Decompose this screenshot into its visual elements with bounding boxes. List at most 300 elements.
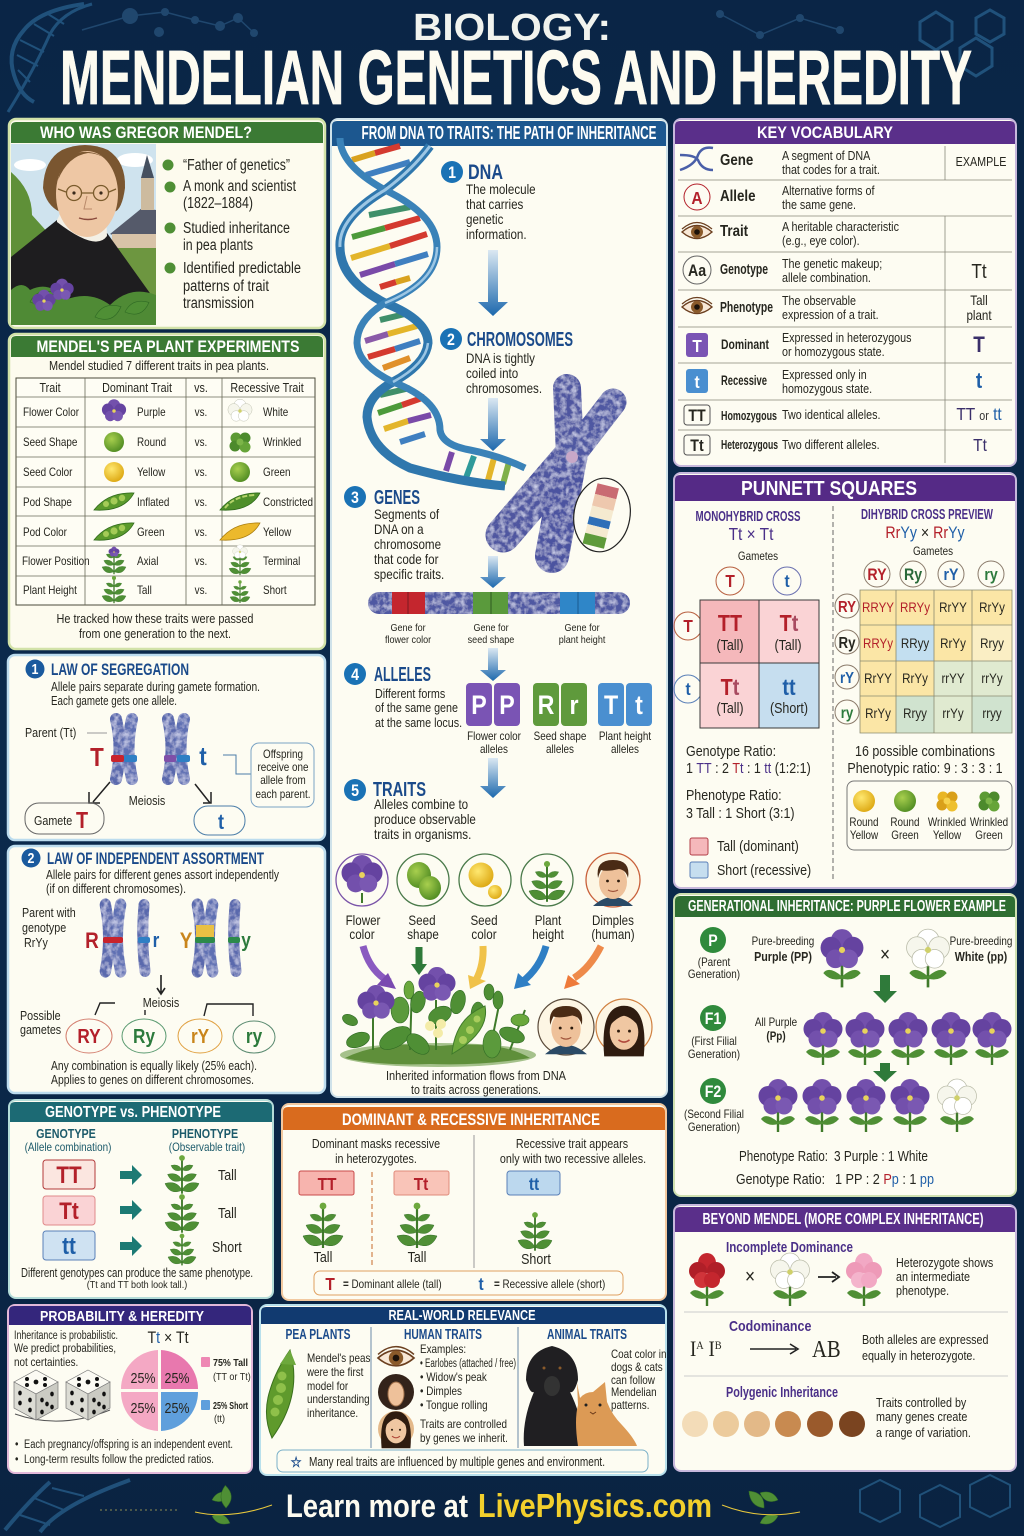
term icons (680, 148, 713, 455)
heading: FROM DNA TO TRAITS: THE PATH OF INHERITANCE (362, 123, 656, 143)
monohybrid cross (674, 509, 819, 878)
plants (303, 1203, 552, 1267)
footer text: LivePhysics.com (478, 1487, 712, 1524)
codominance: equally in heterozygote. (862, 1349, 975, 1363)
bullet list: transmission (183, 295, 254, 312)
ratios: Genotype Ratio: (736, 1172, 825, 1188)
gene bar: plant height (559, 634, 606, 646)
dihybrid cross: rY (840, 670, 854, 687)
dihybrid cross: Phenotypic ratio: 9 : 3 : 3 : 1 (847, 760, 1003, 776)
step 2 chromosomes (440, 328, 573, 396)
allele tiles: Flower color (467, 730, 521, 743)
gamete T: T (76, 808, 88, 833)
gene bar (368, 592, 630, 646)
caption (386, 1069, 567, 1097)
chromosomes: Meiosis (143, 996, 179, 1010)
dihybrid cross: RRYy (900, 600, 931, 615)
chromosome diagram: Parent (Tt) (25, 726, 76, 740)
allele tiles: T (604, 690, 619, 720)
pie legend (201, 1357, 251, 1425)
footnote: from one generation to the next. (79, 627, 231, 641)
step 2 chromosomes: coiled into (466, 366, 518, 381)
dihybrid cross: RrYy × RrYy (885, 524, 965, 542)
human traits column: by genes we inherit. (420, 1432, 508, 1445)
step 4 alleles (344, 663, 462, 730)
chromosomes (85, 905, 253, 1016)
bullets: • (15, 1453, 19, 1466)
monohybrid cross: Tall (dominant) (717, 838, 799, 854)
example column: Tt (973, 435, 987, 455)
legend (314, 1271, 623, 1295)
step 3 genes: chromosome (374, 537, 441, 552)
panel: pea plant experiments (9, 334, 325, 649)
possible gametes (20, 1009, 275, 1053)
dihybrid cross: ry (984, 566, 998, 584)
definitions: or homozygous state. (782, 345, 885, 359)
monohybrid cross: tt (782, 675, 796, 700)
human traits column: HUMAN TRAITS (404, 1327, 482, 1343)
note box (277, 1450, 648, 1472)
monohybrid cross: Gametes (738, 550, 778, 563)
phenotype plants: Tall (218, 1205, 237, 1221)
incomplete dominance: Heterozygote shows (896, 1256, 993, 1270)
trait table: Terminal (263, 555, 300, 568)
intro text: We predict probabilities, (14, 1343, 116, 1355)
animal traits column (524, 1327, 667, 1446)
pie legend: (TT or Tt) (213, 1371, 251, 1383)
incomplete dominance: phenotype. (896, 1284, 949, 1298)
pie chart: 25% (131, 1400, 155, 1416)
number badge and heading: 2 (28, 850, 34, 866)
heading: MENDEL'S PEA PLANT EXPERIMENTS (36, 338, 300, 356)
trait table: Yellow (137, 466, 165, 479)
dihybrid cross: Green (891, 829, 919, 842)
dihybrid cross: RrYy (940, 636, 967, 651)
P generation: Generation) (688, 968, 740, 981)
example column: Tt (971, 260, 987, 282)
plants: Tall (314, 1249, 332, 1265)
trait table: Pod Shape (23, 496, 72, 509)
footer text (286, 1487, 712, 1524)
term icons: TT (688, 407, 706, 425)
F1 generation: All Purple (755, 1016, 797, 1029)
bullet list (162, 157, 301, 312)
terms: Trait (720, 223, 748, 240)
note (51, 1059, 257, 1087)
P generation (688, 927, 1012, 987)
column heads: (Allele combination) (25, 1141, 111, 1154)
ratios: Phenotype Ratio: (739, 1149, 828, 1165)
terms: Genotype (720, 262, 768, 278)
trait table: Inflated (137, 496, 169, 509)
panel: law of independent assortment (8, 846, 325, 1093)
caption: Different genotypes can produce the same phenotype. (21, 1266, 253, 1280)
step 5 traits: Alleles combine to (374, 797, 468, 812)
dihybrid cross (835, 507, 1012, 850)
possible gametes: RY (77, 1025, 101, 1047)
animal traits column: Mendelian (611, 1386, 657, 1399)
step 5 traits (344, 779, 476, 842)
gamete t: t (218, 811, 224, 834)
definitions: the same gene. (782, 198, 856, 212)
step 1 DNA: The molecule (466, 182, 536, 197)
dihybrid cross: 16 possible combinations (855, 743, 995, 759)
codominance: I (690, 1338, 696, 1361)
human traits column (378, 1327, 516, 1448)
column heads: PHENOTYPE (172, 1127, 238, 1141)
monohybrid cross: Tt × Tt (729, 524, 774, 544)
dihybrid cross: Round (890, 816, 920, 829)
trait table: Dominant Trait (102, 381, 173, 395)
pea plants column: Mendel's peas (307, 1352, 370, 1365)
gamete T: Gamete (34, 814, 72, 828)
allele boxes: Tt (414, 1174, 429, 1194)
trait circles: Plant (535, 913, 562, 928)
text headers: Recessive trait appears (516, 1137, 628, 1151)
bullet list: (1822–1884) (183, 195, 253, 212)
trait table: Flower Color (23, 406, 79, 419)
description: Allele pairs separate during gamete formation. (51, 680, 260, 694)
F2 generation (684, 1078, 976, 1134)
arrow (478, 250, 508, 316)
term icons: Tt (690, 437, 704, 455)
heading: PROBABILITY & HEREDITY (40, 1309, 204, 1325)
heading: DOMINANT & RECESSIVE INHERITANCE (342, 1111, 600, 1129)
chromosomes: R (85, 929, 99, 953)
term icons: Aa (688, 262, 707, 280)
bullet list: patterns of trait (183, 278, 270, 295)
codominance: I (704, 1338, 715, 1361)
ratios (736, 1149, 934, 1188)
dihybrid cross: RRYY (862, 600, 895, 615)
P generation: P (708, 932, 718, 950)
human traits column: • Widow's peak (420, 1371, 487, 1384)
intro text: not certainties. (14, 1356, 78, 1369)
cross label: Tt × Tt (147, 1329, 189, 1347)
text headers: Dominant masks recessive (312, 1137, 440, 1151)
step 2 chromosomes: CHROMOSOMES (467, 329, 573, 351)
column heads (25, 1127, 245, 1154)
example column: TT or tt (956, 404, 1002, 424)
bullets: Each pregnancy/offspring is an independent event. (24, 1439, 233, 1451)
trait table: Green (263, 466, 291, 479)
step 3 genes: that code for (374, 552, 438, 567)
panel: from DNA to traits (331, 119, 667, 1097)
codominance: Codominance (729, 1318, 812, 1334)
bullet list: Studied inheritance (183, 220, 290, 237)
P generation: Pure-breeding (950, 935, 1012, 948)
bullets (15, 1438, 233, 1466)
step 5 traits: traits in organisms. (374, 827, 471, 842)
human traits column: Examples: (420, 1343, 466, 1356)
human offspring portraits (538, 999, 652, 1056)
allele tiles: P (499, 690, 515, 720)
allele tiles: r (569, 690, 579, 720)
trait circles: color (349, 927, 375, 942)
trait table: Flower Position (22, 555, 90, 568)
step 1 DNA: genetic (466, 212, 503, 227)
trait table: Recessive Trait (230, 381, 304, 395)
monohybrid cross: (Tall) (716, 700, 744, 716)
dihybrid cross: Wrinkled (928, 816, 966, 829)
animal traits column: dogs & cats (611, 1361, 663, 1374)
step 5 traits: 5 (351, 782, 359, 800)
arrows (120, 1165, 142, 1256)
pea plants column: were the first (306, 1366, 363, 1379)
term icons: t (694, 372, 700, 392)
pea plants column (266, 1327, 370, 1438)
caption: Inherited information flows from DNA (386, 1069, 567, 1083)
footnote: He tracked how these traits were passed (56, 612, 254, 626)
genotype boxes: Tt (59, 1198, 79, 1224)
trait table: Tall (137, 584, 152, 597)
description: Allele pairs for different genes assort independently (46, 868, 280, 882)
footer vines (195, 1485, 800, 1524)
note: Applies to genes on different chromosomes. (51, 1073, 254, 1087)
step 2 chromosomes: chromosomes. (466, 381, 542, 396)
heading: WHO WAS GREGOR MENDEL? (40, 124, 252, 142)
footer text: Learn more at (286, 1488, 468, 1524)
bullet list: in pea plants (183, 237, 253, 254)
pie chart: 25% (131, 1370, 155, 1386)
dihybrid cross: RY (838, 599, 856, 616)
chromosome diagram: Meiosis (129, 794, 165, 808)
trait table: vs. (195, 436, 207, 449)
dihybrid cross: Yellow (933, 829, 961, 842)
arrow (873, 1063, 897, 1082)
definitions: The observable (782, 294, 856, 308)
definitions: Expressed only in (782, 368, 867, 382)
P generation: White (pp) (955, 950, 1007, 964)
monohybrid cross: (Tall) (774, 637, 802, 653)
trait circles: shape (407, 927, 439, 942)
step 2 chromosomes: 2 (447, 331, 455, 349)
allele tiles: Plant height (599, 730, 651, 743)
dihybrid cross: RRYy (863, 636, 894, 651)
coloured arrows into plants (363, 946, 601, 989)
number badge and heading: 1 (32, 661, 39, 677)
step 3 genes: DNA on a (374, 522, 424, 537)
panel: who was Gregor Mendel (9, 119, 325, 328)
text headers (312, 1137, 646, 1166)
note box: ☆ (290, 1454, 302, 1470)
terms: Recessive (721, 373, 767, 388)
possible gametes: ry (246, 1025, 263, 1047)
legend: t (478, 1274, 484, 1294)
animal traits column: Coat color in (611, 1348, 667, 1361)
number badge and heading: LAW OF INDEPENDENT ASSORTMENT (47, 850, 264, 868)
heading: REAL-WORLD RELEVANCE (388, 1308, 536, 1324)
incomplete dominance (689, 1240, 993, 1306)
definitions: A heritable characteristic (782, 220, 899, 234)
chromosomes: y (241, 929, 251, 951)
dihybrid cross: Rryy (903, 706, 928, 721)
allele boxes (299, 1171, 560, 1195)
dihybrid cross: rY (944, 566, 958, 584)
description: (if on different chromosomes). (46, 882, 186, 896)
trait table: Seed Shape (23, 436, 77, 449)
polygenic inheritance (682, 1385, 971, 1440)
possible gametes: Ry (133, 1025, 156, 1047)
dihybrid cross: rrYY (941, 671, 965, 686)
dihybrid cross: Yellow (850, 829, 878, 842)
chromosomes: Y (180, 929, 193, 953)
terms: Phenotype (720, 300, 773, 316)
definitions: Alternative forms of (782, 184, 875, 198)
pie chart: 25% (165, 1370, 189, 1386)
example column: plant (966, 308, 992, 323)
step 1 DNA: information. (466, 227, 527, 242)
text headers: only with two recessive alleles. (500, 1152, 646, 1166)
trait table: vs. (195, 466, 207, 479)
trait table: Trait (40, 381, 61, 395)
title: BIOLOGY: (413, 7, 611, 49)
example column: Tall (970, 293, 988, 308)
monohybrid cross: Tt (780, 611, 798, 636)
incomplete dominance: Incomplete Dominance (726, 1240, 853, 1256)
panel: dominant and recessive inheritance (282, 1104, 666, 1300)
monohybrid cross: Tt (721, 675, 739, 700)
legend: = Recessive allele (short) (494, 1278, 605, 1291)
terms: Gene (720, 152, 753, 169)
human traits column: • Dimples (420, 1385, 462, 1398)
panel: Punnett squares (674, 473, 1016, 888)
monohybrid cross: (Tall) (716, 637, 744, 653)
dihybrid cross: RrYY (864, 671, 892, 686)
legend: T (325, 1274, 335, 1294)
polygenic inheritance: Traits controlled by (876, 1396, 966, 1410)
description (51, 680, 260, 708)
dihybrid cross: Ry (838, 635, 856, 652)
trait table: Round (137, 436, 166, 449)
trait circles: Seed (470, 913, 498, 928)
step 1 DNA (441, 161, 536, 242)
dice (14, 1370, 110, 1421)
heading: KEY VOCABULARY (757, 124, 893, 142)
arrow (480, 648, 506, 681)
term icons: A (691, 188, 703, 208)
pie legend: 25% Short (213, 1400, 248, 1412)
ratios: 1 PP : 2 Pp : 1 pp (835, 1172, 934, 1188)
monohybrid cross: t (784, 571, 790, 591)
step 2 chromosomes: DNA is tightly (466, 351, 536, 366)
dihybrid cross: RY (867, 566, 887, 584)
heading: GENOTYPE vs. PHENOTYPE (45, 1104, 221, 1121)
step 4 alleles: of the same gene (375, 701, 458, 715)
animal traits column: can follow (611, 1374, 655, 1387)
F2 generation: (Second Filial (684, 1108, 744, 1121)
definitions: allele combination. (782, 271, 871, 285)
polygenic inheritance: many genes create (876, 1410, 967, 1424)
P generation: × (880, 943, 890, 965)
chromosome diagram (25, 719, 251, 808)
pea plants illustration (340, 967, 536, 1067)
trait table: White (263, 406, 288, 419)
dihybrid cross: RrYy (902, 671, 929, 686)
DNA double helix (340, 138, 525, 486)
P generation: Pure-breeding (752, 935, 814, 948)
decoration: header DNA and molecules (8, 4, 1004, 112)
step 4 alleles: ALLELES (374, 664, 431, 686)
possible gametes: rY (191, 1025, 210, 1047)
text headers: in heterozygotes. (335, 1152, 417, 1166)
legend: = Dominant allele (tall) (343, 1278, 442, 1291)
animal traits column: patterns. (611, 1399, 649, 1412)
callout: offspring: Offspring (263, 748, 303, 761)
arrow (480, 398, 506, 451)
trait table: vs. (194, 381, 208, 395)
trait table: vs. (195, 406, 207, 419)
gamete t (194, 806, 245, 835)
chromosome illustration (503, 388, 636, 556)
trait circles: (human) (591, 927, 635, 942)
genotype boxes (43, 1160, 95, 1260)
codominance: Both alleles are expressed (862, 1333, 989, 1347)
trait circles: height (532, 927, 564, 942)
number badge and heading (22, 848, 264, 868)
caption: to traits across generations. (411, 1083, 541, 1097)
terms: Homozygous (721, 409, 777, 423)
allele boxes: TT (318, 1174, 337, 1194)
definitions: homozygous state. (782, 382, 872, 396)
genotype boxes: TT (56, 1162, 82, 1188)
definitions: Two different alleles. (782, 438, 880, 452)
parent genotype label: genotype (22, 921, 66, 935)
panel: genotype vs phenotype (9, 1100, 273, 1298)
allele boxes: tt (529, 1174, 540, 1194)
animal traits column: ANIMAL TRAITS (547, 1327, 627, 1343)
step 4 alleles: 4 (351, 666, 359, 684)
dihybrid cross: rrYy (981, 671, 1003, 686)
dihybrid cross: Round (849, 816, 879, 829)
step 4 alleles: at the same locus. (375, 716, 462, 730)
F2 generation: F2 (705, 1083, 721, 1101)
step 5 traits: produce observable (374, 812, 476, 827)
dihybrid cross: RrYy (865, 706, 892, 721)
monohybrid cross: t (685, 679, 691, 699)
P generation: (Parent (698, 956, 730, 969)
human traits column: • Tongue rolling (420, 1399, 488, 1412)
trait table: Purple (137, 406, 166, 419)
codominance (690, 1318, 989, 1363)
allele tiles: alleles (611, 743, 639, 756)
arrow (480, 556, 506, 588)
dividers (678, 146, 1012, 463)
term icons: T (692, 336, 702, 356)
allele tiles: P (471, 690, 487, 720)
allele tiles: alleles (546, 743, 574, 756)
pie legend: 75% Tall (213, 1357, 248, 1369)
step 3 genes: Segments of (374, 507, 440, 522)
portrait of Mendel with church and flowers (11, 144, 156, 325)
polygenic inheritance: Polygenic Inheritance (726, 1385, 838, 1401)
gene bar: seed shape (468, 634, 514, 646)
bullet list: “Father of genetics” (183, 157, 290, 174)
pea plants column: model for (307, 1380, 349, 1393)
pie legend: (tt) (214, 1413, 225, 1425)
codominance: AB (812, 1336, 841, 1362)
parent genotype label: Parent with (22, 906, 76, 920)
possible gametes: gametes (20, 1023, 61, 1037)
trait circles: Flower (346, 913, 380, 928)
example column (956, 155, 1007, 455)
dihybrid cross: Rryy (980, 636, 1005, 651)
number badge and heading (26, 660, 189, 679)
description (46, 868, 280, 896)
allele tiles: R (538, 690, 554, 720)
dihybrid cross: rrYy (942, 706, 964, 721)
monohybrid cross: Genotype Ratio: (686, 743, 776, 759)
